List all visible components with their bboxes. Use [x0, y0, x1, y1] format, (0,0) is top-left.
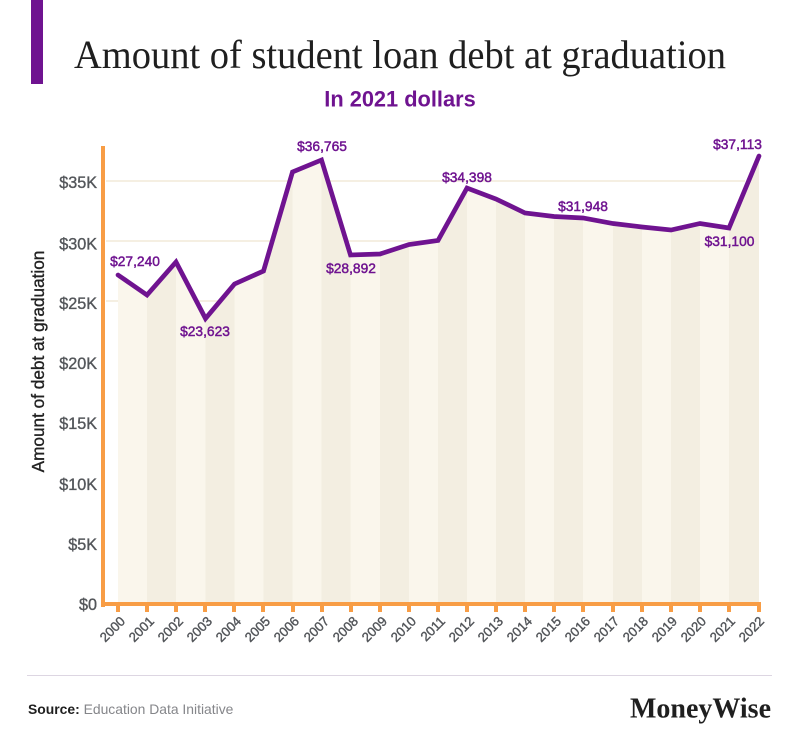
x axis labels: 2011 — [417, 614, 448, 644]
footer divider — [27, 675, 772, 676]
x axis labels: 2003 — [184, 614, 215, 645]
axes — [101, 146, 761, 612]
x axis labels: 2015 — [533, 614, 564, 645]
y axis labels: $35K — [59, 174, 97, 192]
y axis labels: $30K — [59, 236, 97, 254]
line chart — [28, 137, 767, 645]
data labels: $28,892 — [326, 261, 376, 276]
x axis labels: 2009 — [359, 614, 390, 645]
data labels: $27,240 — [110, 254, 160, 269]
x axis labels: 2018 — [620, 614, 651, 645]
y axis labels: $10K — [59, 476, 97, 494]
logo: MoneyWise: MoneyWise — [630, 692, 771, 724]
x axis labels: 2007 — [301, 614, 332, 645]
x axis labels: 2010 — [388, 614, 419, 645]
x axis labels: 2013 — [475, 614, 506, 645]
data line — [118, 156, 759, 318]
x axis labels: 2022 — [736, 614, 767, 645]
x axis labels: 2020 — [678, 614, 709, 645]
grid lines — [106, 181, 745, 301]
y axis labels: $0 — [79, 596, 97, 614]
y axis labels: $20K — [59, 355, 97, 373]
x axis labels: 2012 — [446, 614, 477, 645]
data labels: $34,398 — [442, 170, 492, 185]
area bands under line — [118, 140, 759, 604]
data labels: $37,113 — [713, 137, 762, 152]
title: Amount of student loan debt at graduation — [74, 32, 726, 77]
x axis labels: 2014 — [504, 614, 535, 645]
source: Source: Education Data Initiative — [28, 701, 234, 717]
y axis labels: $5K — [68, 536, 97, 554]
data labels — [110, 137, 762, 339]
data labels: $23,623 — [180, 324, 230, 339]
y axis labels: $15K — [59, 415, 97, 433]
x axis labels: 2019 — [649, 614, 680, 645]
x axis labels: 2001 — [126, 614, 157, 645]
data labels: $36,765 — [297, 139, 347, 154]
data labels: $31,100 — [705, 234, 755, 249]
x axis labels: 2021 — [707, 614, 738, 645]
x axis labels: 2017 — [591, 614, 622, 645]
x axis labels — [97, 614, 767, 645]
y axis title: Amount of debt at graduation — [28, 251, 48, 472]
x axis labels: 2004 — [213, 614, 244, 645]
x axis labels: 2006 — [271, 614, 302, 645]
data labels: $31,948 — [558, 199, 608, 214]
x axis labels: 2002 — [155, 614, 186, 645]
y axis labels: $25K — [59, 295, 97, 313]
x axis labels: 2005 — [242, 614, 273, 645]
x axis labels: 2000 — [97, 614, 128, 645]
accent bar — [31, 0, 43, 84]
x axis labels: 2008 — [330, 614, 361, 645]
subtitle: In 2021 dollars — [324, 86, 476, 112]
x axis labels: 2016 — [562, 614, 593, 645]
y axis labels — [59, 174, 97, 614]
